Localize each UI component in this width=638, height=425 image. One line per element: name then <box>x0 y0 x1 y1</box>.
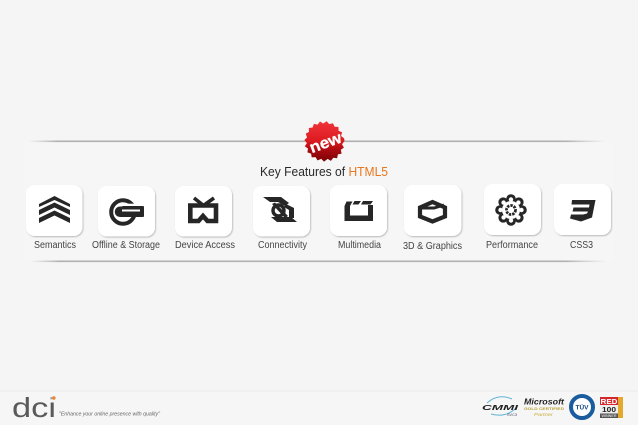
feature: device access <box>175 186 235 251</box>
title: Key Features of HTML5 <box>260 164 388 179</box>
badge: new: new <box>307 130 345 157</box>
logo: dci: dci <box>12 392 56 423</box>
badge: CMMI: CMMI <box>482 405 520 412</box>
icon: power plug <box>111 200 144 224</box>
feature: CSS3 <box>554 184 611 251</box>
badge: new <box>304 121 345 162</box>
icon: linked arrows <box>263 197 297 222</box>
feature: multimedia <box>330 185 387 251</box>
label: device access: Device Access <box>175 240 235 251</box>
badge: Microsoft partner: Partner <box>534 412 554 417</box>
badge: Red 100: RED <box>600 399 618 406</box>
icon: television <box>190 198 216 221</box>
label: offline and storage: Offline & Storage <box>92 240 160 251</box>
badge: Red 100: WINNER <box>602 414 617 418</box>
label: performance: Performance <box>486 240 538 251</box>
icon: 3D box <box>420 202 445 222</box>
badge: Red 100 <box>600 397 623 418</box>
badge: Microsoft partner: GOLD CERTIFIED <box>524 406 564 411</box>
badge: Microsoft partner: Microsoft <box>524 398 564 406</box>
label: multimedia: Multimedia <box>338 240 381 251</box>
badge: TUV: TÜV <box>576 402 589 412</box>
footer <box>0 390 638 425</box>
icon: CSS3 shield <box>570 200 596 222</box>
badge: Red 100: 100 <box>602 407 616 414</box>
label: semantics: Semantics <box>34 240 76 251</box>
label: CSS3: CSS3 <box>570 240 593 251</box>
feature: connectivity <box>253 186 310 251</box>
feature: offline and storage <box>92 186 160 251</box>
feature: performance <box>484 184 541 251</box>
badge: CMMI <box>482 397 520 417</box>
panel: key features <box>24 140 614 262</box>
feature: 3D and graphics <box>403 185 462 252</box>
label: connectivity: Connectivity <box>258 240 307 251</box>
feature: semantics <box>26 185 82 251</box>
label: 3D and graphics: 3D & Graphics <box>403 241 462 252</box>
tagline: "Enhance your online presence with quality" <box>59 412 160 418</box>
icon: stacked chevrons <box>39 196 70 223</box>
badge: Microsoft partner <box>524 398 564 417</box>
badge: CMMI: SVC3 <box>507 413 517 417</box>
icon: gear <box>495 194 527 226</box>
badge: TUV <box>571 396 593 418</box>
icon: clapperboard <box>344 201 373 221</box>
